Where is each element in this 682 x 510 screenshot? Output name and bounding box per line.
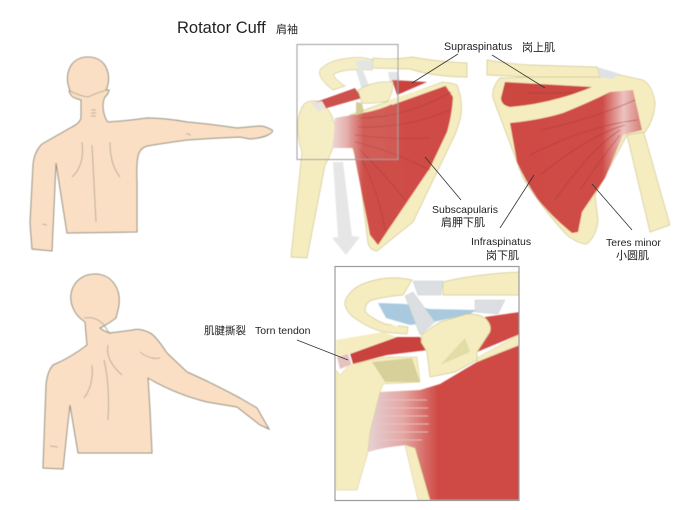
label: teres minor xyxy=(606,237,661,262)
diagram: front view of shoulder xyxy=(291,44,467,258)
scapula bone xyxy=(493,75,655,244)
acromion xyxy=(320,57,373,90)
ligaments xyxy=(355,60,400,90)
label: infraspinatus xyxy=(471,236,531,262)
main muscle xyxy=(368,345,520,500)
label: torn tendon: 肌腱撕裂 xyxy=(204,324,246,337)
title: 肩袖 xyxy=(276,22,298,36)
ligament xyxy=(597,67,620,79)
clavicle xyxy=(487,60,600,77)
coracoid xyxy=(421,314,491,377)
supraspinatus muscle xyxy=(350,337,428,364)
acromion xyxy=(345,278,412,334)
diagram: back view of shoulder xyxy=(487,60,670,244)
ligaments xyxy=(405,281,505,335)
diagram: enlarged view of torn tendon xyxy=(335,266,520,500)
title: Rotator Cuff xyxy=(177,19,266,37)
clavicle xyxy=(370,57,467,77)
label: subscapularis: Subscapularis xyxy=(432,204,498,216)
supraspinatus tendon left xyxy=(313,88,362,110)
humerus xyxy=(291,101,336,258)
muscle: subscapularis xyxy=(332,85,453,245)
label: infraspinatus: Infraspinatus xyxy=(471,236,531,248)
label: supraspinatus: Supraspinatus xyxy=(444,41,512,53)
label: torn tendon xyxy=(204,324,311,337)
zoom box xyxy=(297,44,398,160)
upper right muscle xyxy=(477,312,520,352)
arrow: motion xyxy=(332,162,360,255)
label: subscapularis: 肩胛下肌 xyxy=(441,215,485,229)
figure: person with lowered arm xyxy=(43,274,269,469)
label: teres minor: 小圆肌 xyxy=(616,249,649,262)
label: infraspinatus: 岗下肌 xyxy=(486,249,519,262)
torn tendon xyxy=(337,354,352,369)
humerus xyxy=(627,130,670,232)
label: supraspinatus xyxy=(444,41,555,54)
figure: person with raised arm xyxy=(30,57,272,251)
muscle: supraspinatus xyxy=(501,82,592,107)
scapular spine xyxy=(388,82,448,105)
label: torn tendon: Torn tendon xyxy=(255,325,311,337)
label: supraspinatus: 岗上肌 xyxy=(522,41,555,54)
scapula lateral border xyxy=(405,445,430,500)
scapula bone xyxy=(350,82,462,251)
muscle: infraspinatus and teres minor xyxy=(510,90,642,233)
supraspinatus right xyxy=(392,80,427,95)
frame xyxy=(335,266,519,500)
glenoid shading xyxy=(372,358,420,382)
label: subscapularis xyxy=(432,204,498,229)
humerus xyxy=(336,332,397,356)
clavicle xyxy=(443,272,520,295)
label: teres minor: Teres minor xyxy=(606,237,661,249)
blue bursa xyxy=(378,303,477,325)
coracoid xyxy=(358,82,393,103)
pointer lines xyxy=(297,54,632,360)
spine of scapula xyxy=(477,334,520,362)
